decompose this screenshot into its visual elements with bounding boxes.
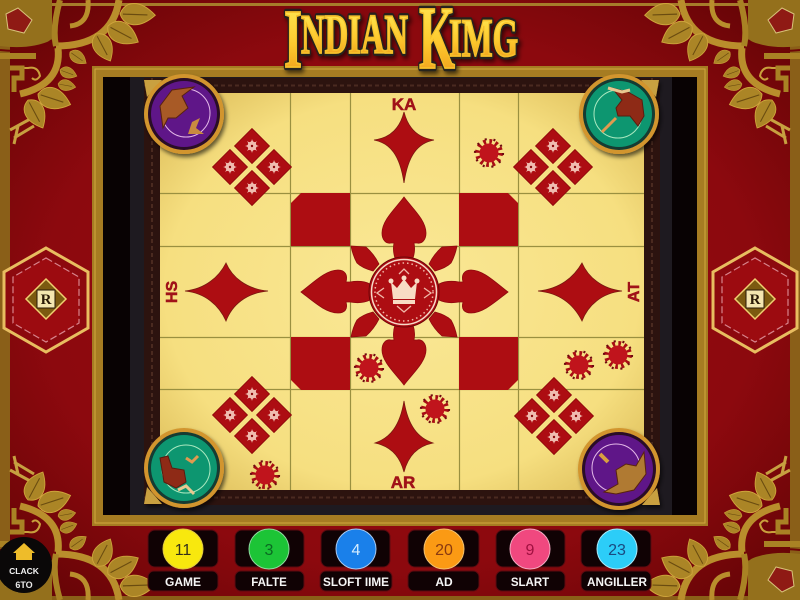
stat: angiller bbox=[581, 529, 651, 591]
stat: sloft iime: 4 bbox=[352, 542, 361, 559]
stat: game: 11 bbox=[175, 542, 191, 559]
board label: KA: KA bbox=[392, 95, 416, 114]
icon: home bbox=[13, 543, 35, 560]
central spade emblem bbox=[301, 197, 508, 385]
title shadow layer: NDIAN bbox=[301, 4, 408, 66]
stat: sloft iime: SLOFT IIME bbox=[323, 577, 389, 589]
star: top bbox=[374, 112, 434, 183]
board label: HS: HS bbox=[164, 281, 181, 303]
star: bottom bbox=[375, 401, 433, 472]
stat: slart: SLART bbox=[511, 577, 549, 589]
center crown medallion bbox=[369, 257, 439, 327]
stat: falte bbox=[235, 529, 304, 591]
stat: angiller: ANGILLER bbox=[587, 577, 648, 589]
hexagon badge: left bbox=[4, 248, 88, 352]
stat: ad bbox=[408, 529, 479, 591]
title shadow layer: IMG bbox=[449, 8, 518, 68]
diamond cluster: bottom right bbox=[514, 378, 594, 454]
title shadow layer bbox=[284, 0, 518, 88]
diamond cluster: top left bbox=[212, 128, 292, 206]
hexagon badge: left: R bbox=[41, 292, 52, 308]
stat: angiller: 23 bbox=[608, 542, 626, 559]
stat: ad: AD bbox=[435, 575, 453, 589]
star: right bbox=[538, 263, 622, 321]
board frame bbox=[92, 66, 708, 526]
stat: slart bbox=[496, 529, 565, 591]
stat: sloft iime bbox=[320, 529, 392, 591]
stat: falte: FALTE bbox=[251, 577, 287, 589]
stat: falte: 3 bbox=[265, 542, 274, 559]
spiky marks bbox=[251, 139, 632, 489]
stat: slart: 9 bbox=[526, 542, 535, 559]
board label: AT: AT bbox=[626, 282, 643, 302]
stat: game: GAME bbox=[165, 575, 201, 589]
top spade bbox=[382, 197, 426, 258]
title bbox=[284, 0, 518, 88]
corner ornament: bottom left bbox=[0, 456, 156, 600]
stat: game bbox=[148, 529, 218, 591]
diamond cluster: top right bbox=[514, 128, 592, 206]
red squares bbox=[291, 193, 518, 390]
bottom spade bbox=[382, 325, 426, 385]
diagonal petals bbox=[351, 246, 379, 271]
title gold lettering bbox=[284, 0, 518, 88]
board playing surface bbox=[160, 93, 644, 490]
corner ornament: top right bbox=[644, 0, 800, 144]
medallion: bottom left green bbox=[144, 428, 224, 508]
right spade bbox=[439, 270, 508, 313]
left spade bbox=[301, 270, 370, 313]
medallion: top left purple bbox=[144, 74, 224, 154]
corner ornament: top left bbox=[0, 0, 156, 144]
home button: 6TO bbox=[15, 580, 33, 590]
home button bbox=[0, 537, 52, 593]
stat: ad: 20 bbox=[435, 542, 453, 559]
board label: AR: AR bbox=[391, 473, 415, 492]
hexagon badge: right: R bbox=[750, 292, 761, 308]
title gold lettering: NDIAN bbox=[301, 4, 408, 66]
home button: CLACK bbox=[9, 566, 40, 576]
diamond cluster: bottom left bbox=[212, 376, 292, 454]
title gold lettering: IMG bbox=[449, 8, 518, 68]
corner ornament: bottom right bbox=[644, 456, 800, 600]
star: left bbox=[185, 263, 268, 321]
medallion: top right green bbox=[579, 74, 659, 154]
hexagon badge: right bbox=[713, 248, 797, 352]
medallion: bottom right purple bbox=[578, 428, 660, 510]
